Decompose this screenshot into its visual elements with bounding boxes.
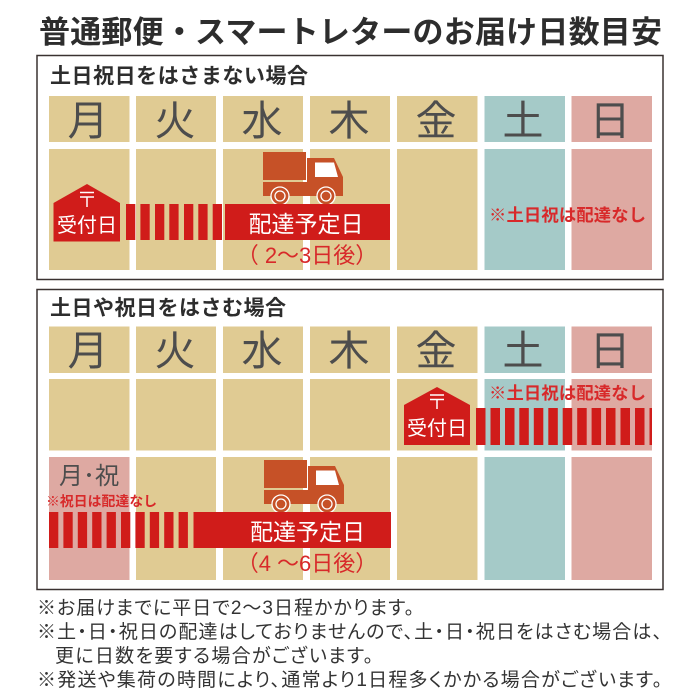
weekday header row (49, 96, 652, 144)
delivery date bar: 配達予定日 (248, 211, 364, 237)
weekday header row: 水 (242, 328, 282, 374)
weekday header row: 月 (68, 98, 108, 144)
icon: post office marker with acceptance day (54, 184, 120, 242)
weekday header row: 木 (328, 328, 370, 374)
calendar week 2 cells (49, 457, 652, 580)
delivery range label: （ 2〜3日後） (237, 243, 377, 268)
weekday header row: 水 (242, 98, 282, 144)
weekday header row: 金 (416, 328, 456, 374)
transit stripes, week 1 (476, 408, 652, 445)
footnotes: ※お届けまでに平日で2〜3日程かかります。 (37, 597, 414, 619)
icon: delivery truck (264, 460, 344, 513)
heading: panel 1: 土日祝日をはさまない場合 (50, 65, 308, 88)
panel: no weekend or holiday in between (37, 56, 663, 280)
heading: panel 2: 土日や祝日をはさむ場合 (50, 297, 286, 320)
weekday header row: 火 (154, 98, 196, 144)
calendar body cells (49, 149, 652, 270)
transit stripes (126, 204, 222, 240)
footnotes: 更に日数を要する場合がございます。 (55, 644, 373, 667)
delivery date bar: 配達予定日 (250, 519, 365, 545)
weekday header row: 日 (590, 328, 630, 374)
footnotes: ※発送や集荷の時間により、通常より1日程多くかかる場合がございます。 (37, 668, 662, 691)
footnotes: ※土・日・祝日の配達はしておりませんので、土・日・祝日をはさむ場合は、 (37, 621, 662, 643)
weekday header row: 土 (502, 98, 544, 144)
weekday header row: 木 (328, 98, 370, 144)
panel: weekend or holiday in between (37, 290, 663, 590)
weekday header row: 火 (154, 328, 196, 374)
calendar week 1 cells (49, 379, 652, 450)
title: 普通郵便・スマートレターのお届け日数目安 (39, 15, 662, 50)
weekday header row: 月 (68, 328, 108, 374)
holiday Monday label: 月･祝 (59, 463, 119, 490)
icon: delivery truck (263, 152, 343, 205)
transit stripes, week 2 (49, 512, 188, 548)
note: no weekend delivery: ※土日祝は配達なし (489, 383, 646, 403)
icon: post office marker with acceptance day: 受付日 (57, 214, 117, 237)
weekday header row: 日 (590, 98, 630, 144)
weekday header row: 金 (416, 98, 456, 144)
footnotes (37, 597, 662, 691)
icon: post office marker with acceptance day (404, 387, 470, 445)
weekday header row (49, 326, 652, 374)
delivery date bar (225, 204, 390, 240)
weekday header row: 土 (502, 328, 544, 374)
note: no weekend delivery: ※土日祝は配達なし (489, 205, 646, 225)
note: no holiday delivery: ※祝日は配達なし (46, 493, 157, 509)
delivery range label: （4 〜6日後） (237, 551, 377, 576)
delivery date bar (194, 512, 391, 548)
icon: post office marker with acceptance day: 受付日 (407, 417, 467, 440)
